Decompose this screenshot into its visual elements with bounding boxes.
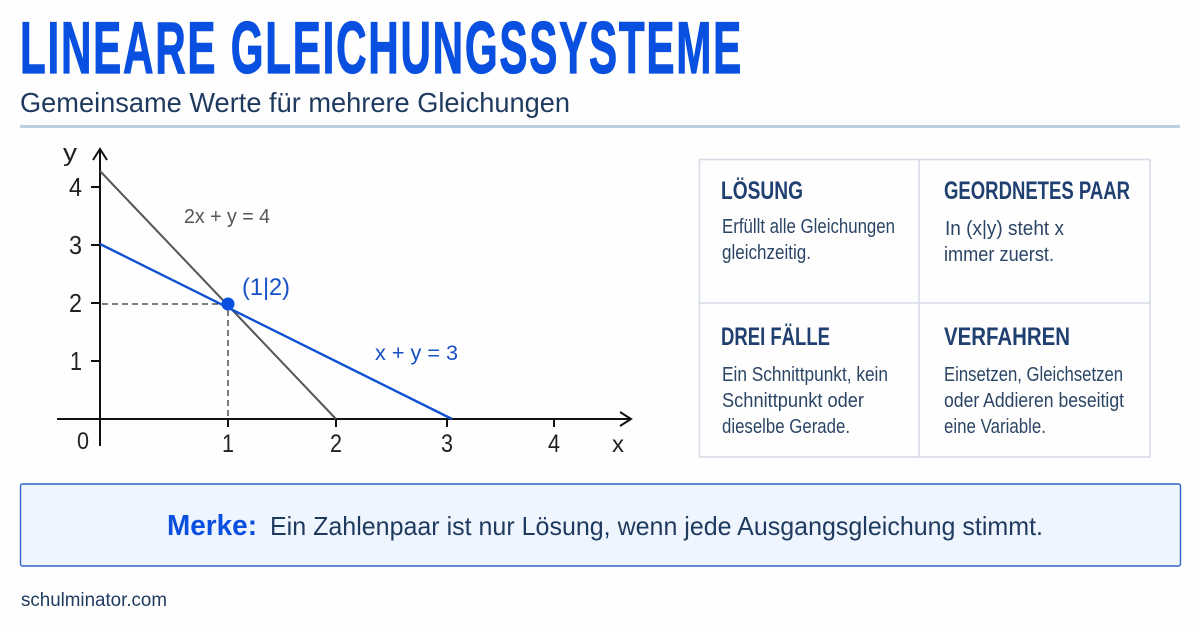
x axis labels: 2 bbox=[330, 430, 342, 458]
card: Geordnetes Paar: GEORDNETES PAAR bbox=[944, 177, 1130, 205]
line: x + y = 3 bbox=[100, 244, 452, 419]
callout: Ein Zahlenpaar ist nur Lösung, wenn jede Ausgangsgleichung stimmt. bbox=[270, 511, 1043, 541]
callout bbox=[20, 484, 1180, 566]
card: Lösung: gleichzeitig. bbox=[722, 242, 811, 264]
callout: Merke: bbox=[167, 510, 257, 542]
card: Lösung: Erfüllt alle Gleichungen bbox=[722, 216, 895, 238]
y axis labels bbox=[63, 140, 89, 455]
y axis labels: 3 bbox=[69, 230, 82, 260]
y axis labels: y bbox=[63, 140, 77, 167]
card: Drei Fälle: dieselbe Gerade. bbox=[722, 416, 850, 438]
card: Geordnetes Paar bbox=[944, 177, 1130, 266]
card: Drei Fälle: Schnittpunkt oder bbox=[722, 390, 864, 412]
card: Drei Fälle bbox=[721, 323, 888, 438]
card: Verfahren: VERFAHREN bbox=[944, 323, 1070, 351]
y axis labels: 0 bbox=[77, 428, 89, 455]
intersection point bbox=[222, 298, 234, 310]
label: intersection: (1|2) bbox=[242, 274, 290, 301]
label: gray equation: 2x + y = 4 bbox=[184, 206, 270, 228]
card: Verfahren: Einsetzen, Gleichsetzen bbox=[944, 364, 1123, 386]
card: Verfahren bbox=[944, 323, 1124, 438]
card: Drei Fälle: Ein Schnittpunkt, kein bbox=[722, 364, 888, 386]
card: Geordnetes Paar: immer zuerst. bbox=[944, 244, 1054, 266]
x axis labels: 3 bbox=[441, 430, 453, 458]
y axis labels: 1 bbox=[70, 346, 82, 376]
label: blue equation: x + y = 3 bbox=[375, 342, 458, 365]
card: Geordnetes Paar: In (x|y) steht x bbox=[945, 218, 1064, 240]
y axis labels: 4 bbox=[69, 172, 82, 202]
chart: linear system graph bbox=[57, 140, 631, 458]
card: Verfahren: oder Addieren beseitigt bbox=[944, 390, 1124, 412]
y axis bbox=[91, 149, 107, 446]
card: Lösung bbox=[721, 176, 895, 264]
line: 2x + y = 4 bbox=[100, 171, 336, 419]
card: Drei Fälle: DREI FÄLLE bbox=[721, 323, 830, 351]
x axis labels: 1 bbox=[222, 430, 234, 458]
card: Verfahren: eine Variable. bbox=[944, 416, 1046, 438]
x axis labels: 4 bbox=[548, 430, 560, 458]
x axis bbox=[57, 412, 631, 427]
guide lines to intersection bbox=[102, 304, 228, 419]
card: Lösung: LÖSUNG bbox=[721, 176, 803, 205]
x axis labels: x bbox=[612, 431, 625, 457]
subtitle: Gemeinsame Werte für mehrere Gleichungen bbox=[20, 87, 570, 118]
x axis labels bbox=[222, 430, 625, 458]
footer source: schulminator.com bbox=[21, 590, 167, 611]
panel: definitions grid bbox=[699, 159, 1150, 457]
y axis labels: 2 bbox=[69, 288, 82, 318]
